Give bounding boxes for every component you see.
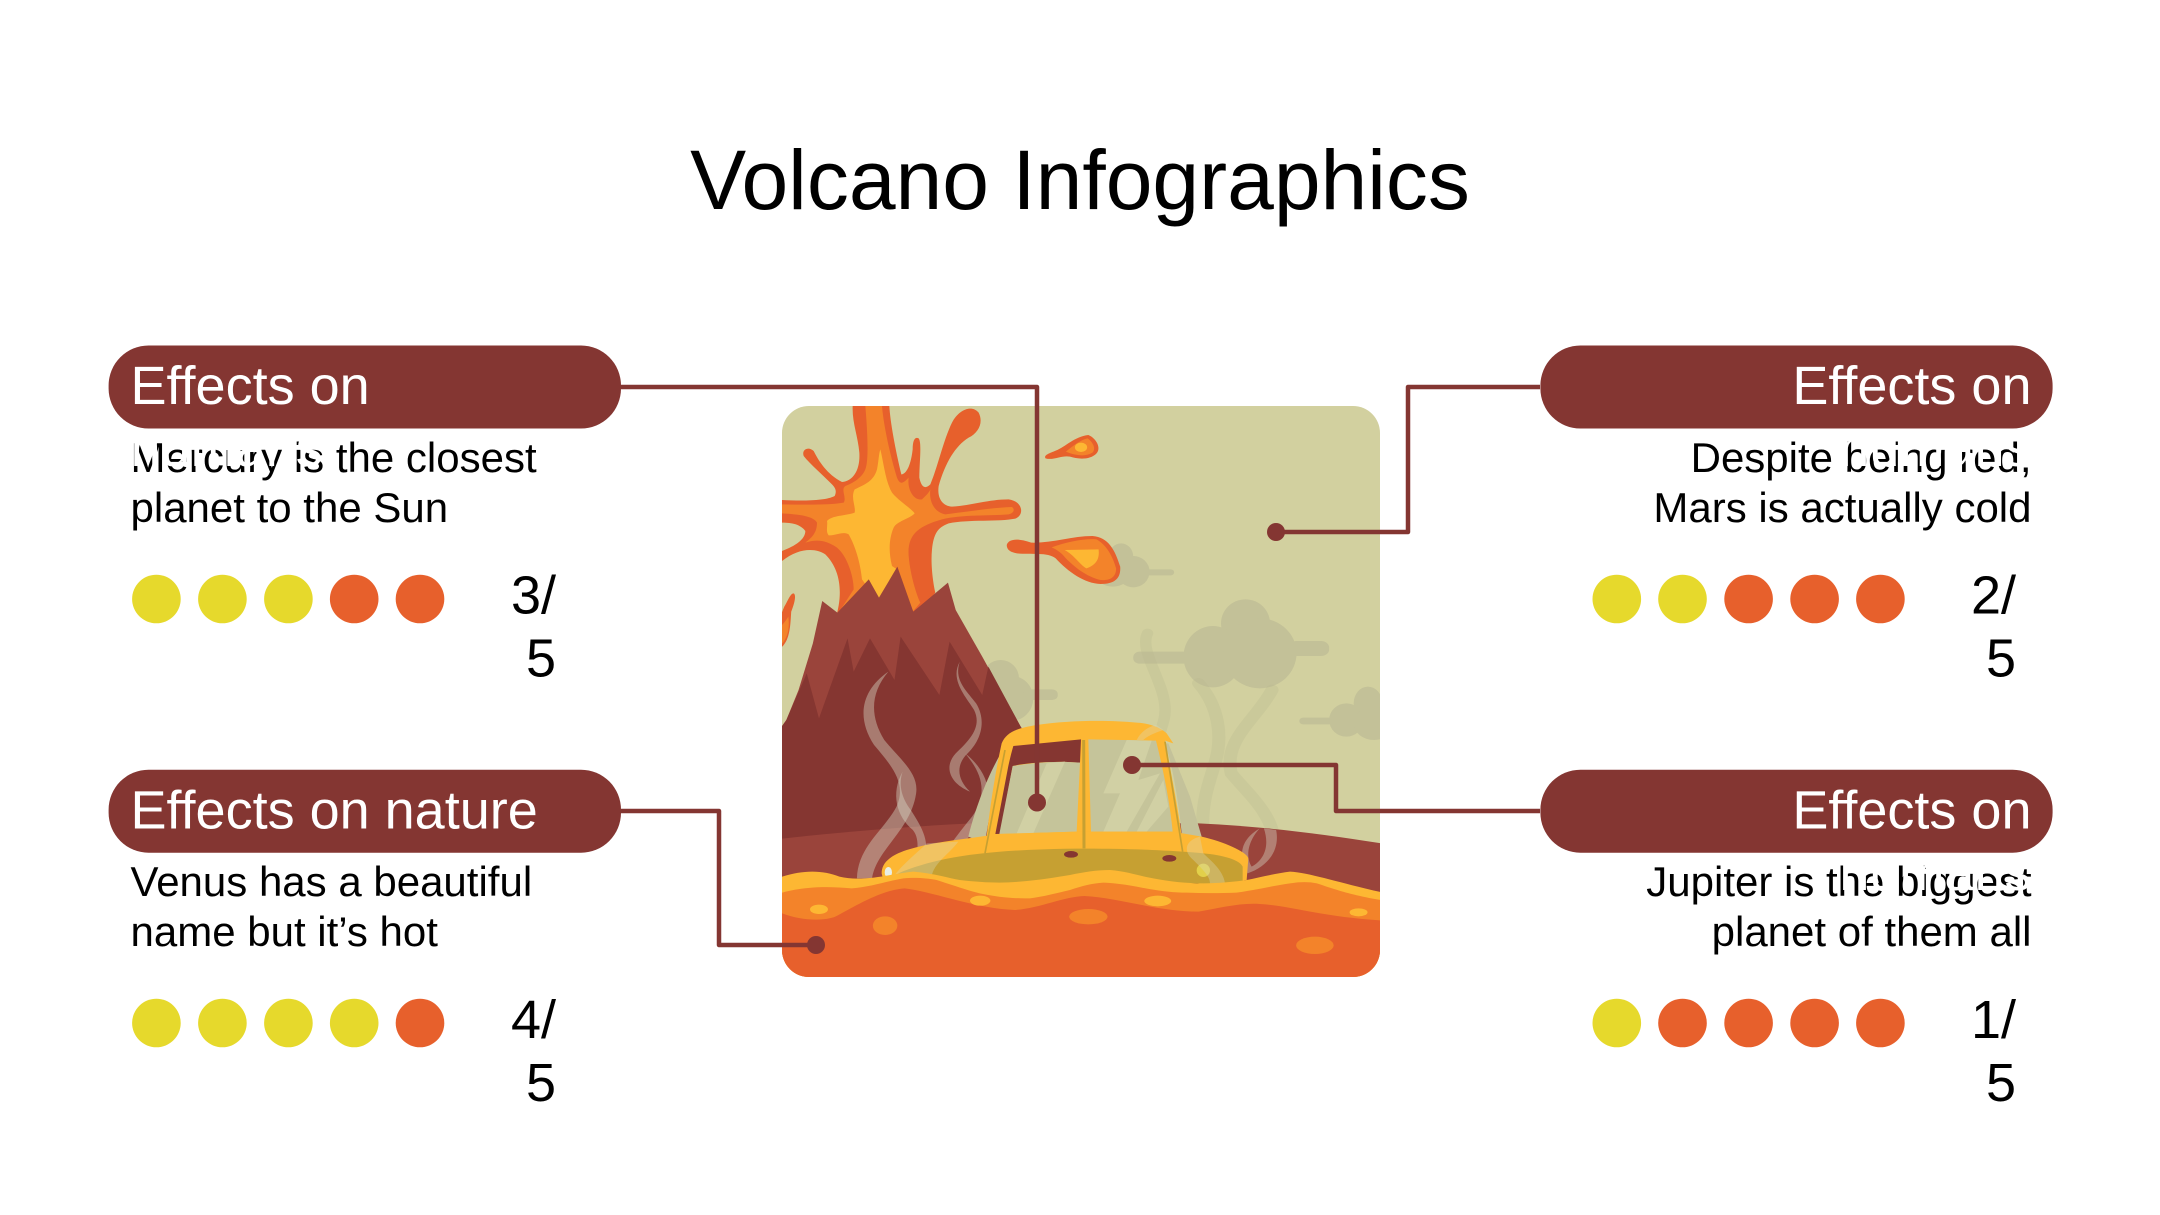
rating dots: 3 of 5 [132, 575, 444, 623]
score: 1/ [1971, 990, 2016, 1050]
score: 5 [1986, 1053, 2016, 1113]
description: name but it’s hot [130, 908, 438, 955]
connector: top right pill to sky [1267, 387, 1540, 541]
title: Volcano Infographics [690, 133, 1470, 227]
description: Venus has a beautiful [130, 858, 532, 905]
description: Jupiter is the biggest [1646, 858, 2032, 905]
panel: bottom right effects [1540, 770, 2053, 1113]
heading text: Effects on [1792, 780, 2032, 840]
heading pill [1540, 346, 2053, 428]
panel: bottom left effects [109, 770, 621, 1113]
connector: top left pill to car window [621, 387, 1046, 812]
smoke in front of the volcano [857, 662, 989, 878]
car [882, 721, 1248, 887]
ground [770, 822, 1423, 957]
heading pill [109, 770, 621, 853]
rating dots: 4 of 5 [132, 999, 444, 1047]
score: 4/ [511, 990, 556, 1050]
overflowing heading word: humans [130, 418, 323, 478]
score: 2/ [1971, 566, 2016, 626]
score: 3/ [511, 566, 556, 626]
heading text: Effects on [1792, 356, 2032, 416]
description: planet to the Sun [130, 484, 448, 531]
heading text: Effects on nature [130, 780, 538, 840]
panel: top right effects [1540, 346, 2053, 688]
sky background [782, 406, 1380, 977]
volcano [782, 566, 1022, 839]
connector: bottom left pill to lava [621, 811, 825, 954]
description: planet of them all [1712, 908, 2032, 955]
smoke in the sky [1146, 633, 1274, 847]
smoke over the right ground [1242, 828, 1277, 873]
description: Mercury is the closest [130, 434, 537, 481]
score: 5 [1986, 628, 2016, 688]
eruption flame [782, 406, 1021, 619]
overflowing heading word: humans [1839, 842, 2032, 902]
clouds [982, 543, 1394, 740]
description: Mars is actually cold [1653, 484, 2032, 531]
overflowing heading word: humans [1839, 418, 2032, 478]
lava [782, 870, 1380, 977]
lava droplets [770, 435, 1120, 650]
rating dots: 2 of 5 [1592, 575, 1905, 623]
connector: bottom right pill to car [1123, 756, 1540, 811]
heading pill [109, 346, 621, 428]
illustration: volcano erupting over a car in lava [782, 406, 1380, 977]
heading text: Effects on [130, 356, 370, 416]
score: 5 [526, 628, 556, 688]
panel: top left effects [109, 346, 621, 688]
heading pill [1540, 770, 2053, 853]
rating dots: 1 of 5 [1592, 999, 1905, 1047]
description: Despite being red, [1691, 434, 2032, 481]
score: 5 [526, 1053, 556, 1113]
smoke over the car [893, 725, 1225, 883]
